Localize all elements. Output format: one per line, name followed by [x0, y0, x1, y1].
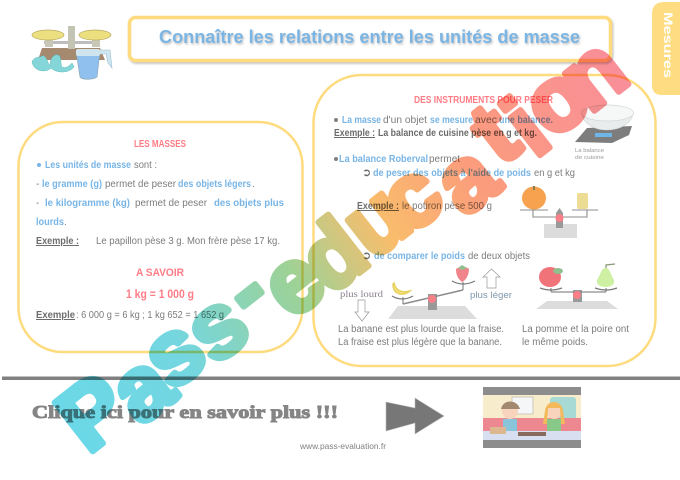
video thumbnail — [483, 387, 581, 448]
text block: exemple: Exemple : — [36, 236, 79, 247]
text block: balance Roberval: permet — [429, 154, 460, 165]
arrow: up — [483, 269, 500, 288]
heading: a savoir: A SAVOIR — [136, 267, 184, 279]
text block: unités de masse: permet de peser — [105, 179, 177, 190]
arrow: down — [355, 300, 369, 321]
tab: Mesures: Mesures — [661, 12, 675, 78]
title: Connaître les relations entre les unités de masse — [159, 26, 580, 47]
text block: comparer — [362, 249, 530, 262]
text block: unités de masse: le kilogramme (kg) — [45, 198, 130, 209]
text block: balance Roberval: La balance Roberval — [339, 154, 428, 165]
text block: unités de masse: . — [252, 179, 255, 190]
text block: balance Roberval: ➲ — [362, 166, 371, 179]
icon: kitchen scale — [575, 105, 634, 143]
text block: unités de masse: sont : — [134, 160, 157, 171]
icon: tilted scale with banana and strawberry — [388, 265, 477, 319]
icon: balance, measuring tape and jug — [32, 26, 112, 79]
text block: comparer: de deux objets — [468, 251, 530, 262]
label: plus léger: plus léger — [470, 290, 512, 301]
text block: unités de masse: le gramme (g) — [42, 179, 102, 190]
text block: unités de masse: - — [36, 179, 39, 190]
footer divider — [2, 376, 680, 380]
text block: la masse: Exemple : — [334, 128, 375, 139]
tab: Mesures — [652, 2, 680, 95]
text block: balance Roberval — [334, 154, 575, 179]
text block: exemple potiron: le potiron pèse 500 g — [402, 201, 492, 212]
icon: scale with pumpkin and weight — [520, 186, 598, 238]
text block: la masse: une balance. — [499, 115, 553, 126]
text block: unités de masse: des objets légers — [178, 179, 251, 190]
caption: kitchen scale: de cuisine — [575, 155, 604, 161]
arrow: to video — [386, 398, 444, 434]
text block: balance Roberval: en g et kg — [534, 168, 575, 179]
panel: des instruments pour peser — [314, 75, 656, 366]
text block: unités de masse: lourds — [36, 217, 64, 228]
text block: banane et fraise: La banane est plus lourde que la fraise. — [338, 324, 504, 335]
text block: exemple potiron — [357, 201, 492, 212]
heading: instruments: DES INSTRUMENTS POUR PESER — [414, 95, 554, 106]
text block: la masse: d'un objet — [383, 115, 427, 126]
text block: la masse: avec — [475, 115, 497, 126]
website url: www.pass-evaluation.fr — [299, 441, 386, 451]
label: plus lourd: plus lourd — [340, 290, 383, 300]
caption: kitchen scale: La balance — [575, 148, 604, 154]
watermark: Pass-education — [39, 18, 645, 471]
text block: unités de masse: permet de peser — [135, 198, 208, 209]
text block: pomme et poire: le même poids. — [522, 337, 588, 348]
text block: unités de masse — [36, 160, 284, 228]
text block: conversion example: Exemple — [36, 310, 75, 321]
text block: unités de masse: des objets plus — [214, 198, 284, 209]
caption: kitchen scale — [575, 148, 604, 161]
text block: comparer: de comparer le poids — [374, 251, 465, 262]
text block: unités de masse: - — [36, 198, 39, 209]
text block: banane et fraise — [338, 324, 504, 348]
panel: les masses — [18, 122, 302, 352]
text block: unités de masse: . — [64, 217, 67, 228]
text block: exemple potiron: Exemple : — [357, 201, 399, 212]
text block: banane et fraise: La fraise est plus légère que la banane. — [338, 337, 502, 348]
icon: balanced scale with apple and pear — [536, 264, 618, 309]
formula: 1 kg = 1 000 g — [126, 287, 194, 301]
text block: balance Roberval: de peser des objets à l'aide de poids — [373, 168, 531, 179]
text block: la masse: La masse — [342, 115, 381, 126]
text block: la masse: La balance de cuisine pèse en g et kg. — [378, 128, 537, 139]
text block: la masse: se mesure — [430, 115, 473, 126]
text block: pomme et poire: La pomme et la poire ont — [522, 324, 629, 335]
text block: pomme et poire — [522, 324, 629, 348]
text block: comparer: ➲ — [362, 249, 371, 262]
heading: les masses: LES MASSES — [134, 139, 186, 150]
text block: conversion example: : 6 000 g = 6 kg ; 1 kg 652 = 1 652 g — [76, 310, 224, 321]
call to action: Clique ici pour en savoir plus !!! — [32, 402, 338, 422]
text block: exemple: Le papillon pèse 3 g. Mon frère pèse 17 kg. — [96, 236, 280, 247]
text block: la masse — [334, 115, 553, 139]
title box — [130, 18, 610, 60]
text block: unités de masse: Les unités de masse — [45, 160, 131, 171]
